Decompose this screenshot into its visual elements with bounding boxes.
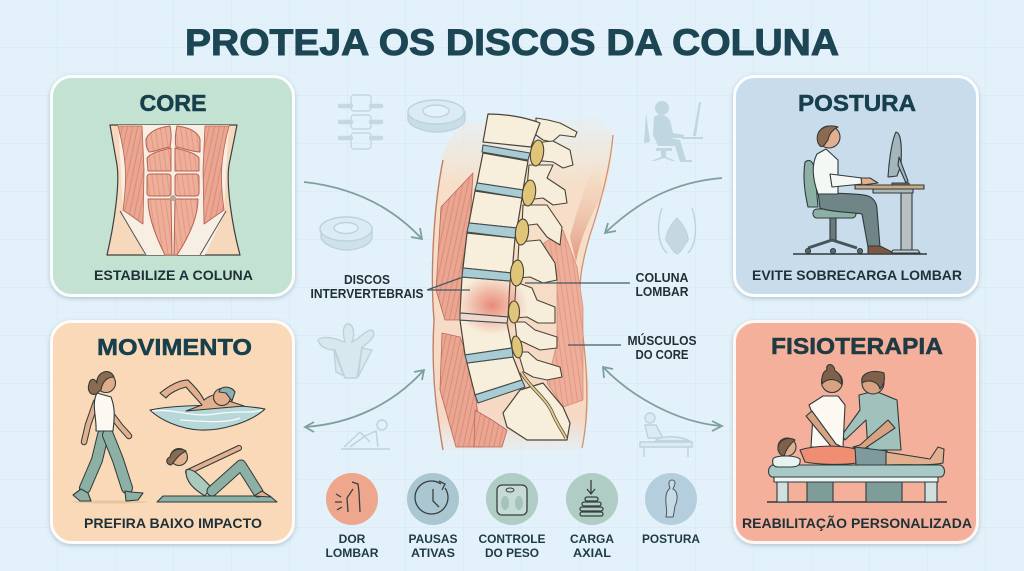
vertebral bodies xyxy=(460,114,570,440)
icon: low back pain: DOR xyxy=(339,532,366,546)
icon: axial load xyxy=(566,473,618,560)
icon: axial load: AXIAL xyxy=(573,546,611,560)
panel: core xyxy=(52,76,294,296)
label: core muscles: DO CORE xyxy=(636,348,688,362)
arrow: core to spine xyxy=(304,182,422,239)
label: intervertebral discs xyxy=(310,273,470,301)
intervertebral discs xyxy=(460,145,530,403)
arrow: physiotherapy and spine xyxy=(603,367,722,431)
left muscles xyxy=(436,173,507,447)
ghost icon: disc xyxy=(408,100,465,132)
label: lumbar spine: COLUNA xyxy=(636,271,688,285)
label: core muscles: MÚSCULOS xyxy=(628,333,696,348)
heading: postura: POSTURA xyxy=(798,90,916,116)
icon: posture silhouette xyxy=(642,473,700,546)
icon: active breaks clock: PAUSAS xyxy=(408,532,458,546)
illustration: swimmer xyxy=(150,380,265,430)
arrow: posture to spine xyxy=(605,178,722,233)
panel: fisioterapia xyxy=(734,322,978,542)
icon: active breaks clock xyxy=(407,473,459,560)
icon: weight scale xyxy=(478,473,546,560)
anatomy: lumbar spine illustration xyxy=(432,114,613,450)
spinal nerve xyxy=(521,372,566,438)
ghost icon: back muscles xyxy=(659,208,695,254)
inflammation glow xyxy=(456,275,528,335)
heading: movimento: MOVIMENTO xyxy=(97,334,252,360)
facet joints xyxy=(508,139,545,359)
caption: fisioterapia: REABILITAÇÃO PERSONALIZADA xyxy=(742,514,972,531)
label: intervertebral discs: DISCOS xyxy=(344,273,390,287)
ghost icon: sit-up xyxy=(341,420,390,449)
illustration: abdominal muscles xyxy=(107,125,240,255)
icon: low back pain xyxy=(326,473,379,560)
ghost icon: torso muscles xyxy=(318,324,374,378)
label: core muscles xyxy=(568,333,696,362)
illustration: seated desk worker xyxy=(793,126,927,254)
ghost icon: damaged disc xyxy=(320,217,372,250)
heading: core: CORE xyxy=(140,90,206,116)
spinous processes xyxy=(514,118,577,380)
label: lumbar spine xyxy=(525,271,688,299)
panel: movimento xyxy=(52,322,294,542)
icon row: risk factors xyxy=(326,473,700,560)
ghost icon: massage xyxy=(640,413,692,457)
heading: fisioterapia: FISIOTERAPIA xyxy=(771,333,943,359)
icon: weight scale: DO PESO xyxy=(485,546,539,560)
arrow: movement and spine xyxy=(305,370,424,432)
label: intervertebral discs: INTERVERTEBRAIS xyxy=(310,287,424,301)
illustration: sit-up on mat xyxy=(157,448,277,502)
illustration: walking woman xyxy=(72,372,148,504)
body silhouette xyxy=(433,118,613,450)
caption: postura: EVITE SOBRECARGA LOMBAR xyxy=(752,267,962,283)
label: lumbar spine: LOMBAR xyxy=(636,285,688,299)
panel: postura xyxy=(734,76,978,296)
title: PROTEJA OS DISCOS DA COLUNA xyxy=(185,21,839,63)
caption: core: ESTABILIZE A COLUNA xyxy=(94,267,253,283)
illustration: physiotherapists treating patient xyxy=(767,364,947,502)
caption: movimento: PREFIRA BAIXO IMPACTO xyxy=(84,515,262,531)
ghost icon: seated person xyxy=(644,101,703,162)
right muscles xyxy=(570,157,603,262)
icon: active breaks clock: ATIVAS xyxy=(411,546,455,560)
icon: low back pain: LOMBAR xyxy=(326,546,379,560)
icon: posture silhouette: POSTURA xyxy=(642,532,700,546)
ghost icon: spine segment xyxy=(340,95,381,149)
icon: axial load: CARGA xyxy=(570,532,614,546)
icon: weight scale: CONTROLE xyxy=(478,532,546,546)
